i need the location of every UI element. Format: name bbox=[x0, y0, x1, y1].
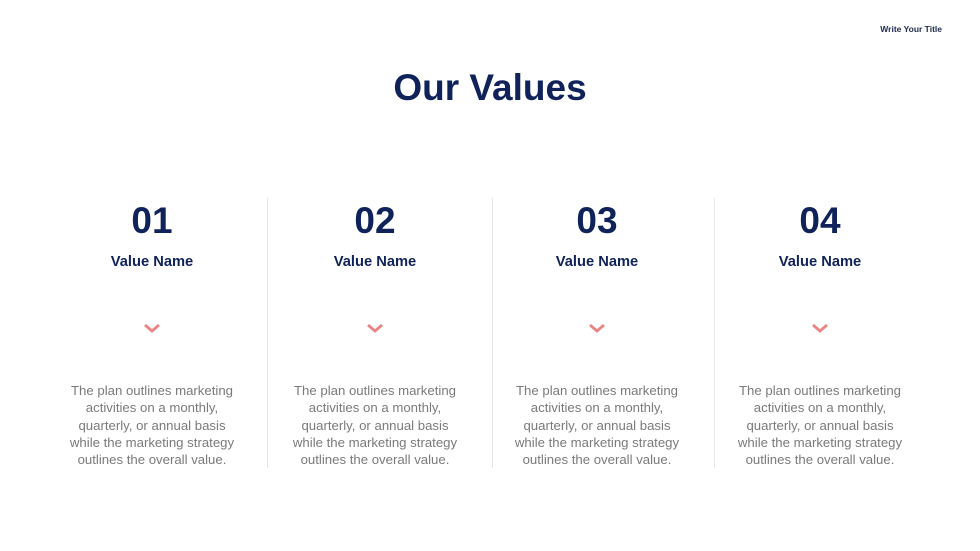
header label: Write Your Title bbox=[880, 24, 942, 34]
number 02: 02 bbox=[354, 200, 396, 241]
value name 1: Value Name bbox=[111, 254, 193, 270]
title: Our Values bbox=[393, 67, 587, 108]
description 4: quarterly, or annual basis bbox=[746, 418, 894, 433]
description 4: The plan outlines marketing bbox=[739, 383, 901, 398]
number 01: 01 bbox=[131, 200, 173, 241]
icon: chevron 2 bbox=[367, 324, 383, 333]
value name 4: Value Name bbox=[779, 254, 861, 270]
description 3: activities on a monthly, bbox=[531, 400, 663, 415]
description 4 bbox=[738, 383, 902, 467]
description 1: quarterly, or annual basis bbox=[78, 418, 226, 433]
value name 2: Value Name bbox=[334, 254, 416, 270]
description 3 bbox=[514, 383, 679, 467]
number 03: 03 bbox=[576, 200, 618, 241]
description 4: activities on a monthly, bbox=[754, 400, 886, 415]
description 2: The plan outlines marketing bbox=[294, 383, 456, 398]
description 3: while the marketing strategy bbox=[515, 435, 679, 450]
icon: chevron 3 bbox=[589, 324, 605, 333]
description 4: while the marketing strategy bbox=[738, 435, 902, 450]
value name 3: Value Name bbox=[556, 254, 638, 270]
description 3: quarterly, or annual basis bbox=[523, 418, 671, 433]
description 1: activities on a monthly, bbox=[86, 400, 218, 415]
description 1 bbox=[70, 383, 234, 467]
description 3: The plan outlines marketing bbox=[516, 383, 678, 398]
column 3 bbox=[514, 200, 679, 467]
description 3: outlines the overall value. bbox=[523, 452, 671, 467]
description 2: outlines the overall value. bbox=[301, 452, 449, 467]
column 4 bbox=[738, 200, 902, 467]
description 4: outlines the overall value. bbox=[746, 452, 894, 467]
column 1 bbox=[70, 200, 234, 467]
description 1: The plan outlines marketing bbox=[71, 383, 233, 398]
number 04: 04 bbox=[799, 200, 841, 241]
description 2 bbox=[292, 383, 457, 467]
description 2: quarterly, or annual basis bbox=[301, 418, 449, 433]
description 2: activities on a monthly, bbox=[309, 400, 441, 415]
icon: chevron 1 bbox=[144, 324, 160, 333]
description 1: outlines the overall value. bbox=[78, 452, 226, 467]
description 2: while the marketing strategy bbox=[293, 435, 457, 450]
column 2 bbox=[292, 200, 457, 467]
description 1: while the marketing strategy bbox=[70, 435, 234, 450]
icon: chevron 4 bbox=[812, 324, 828, 333]
